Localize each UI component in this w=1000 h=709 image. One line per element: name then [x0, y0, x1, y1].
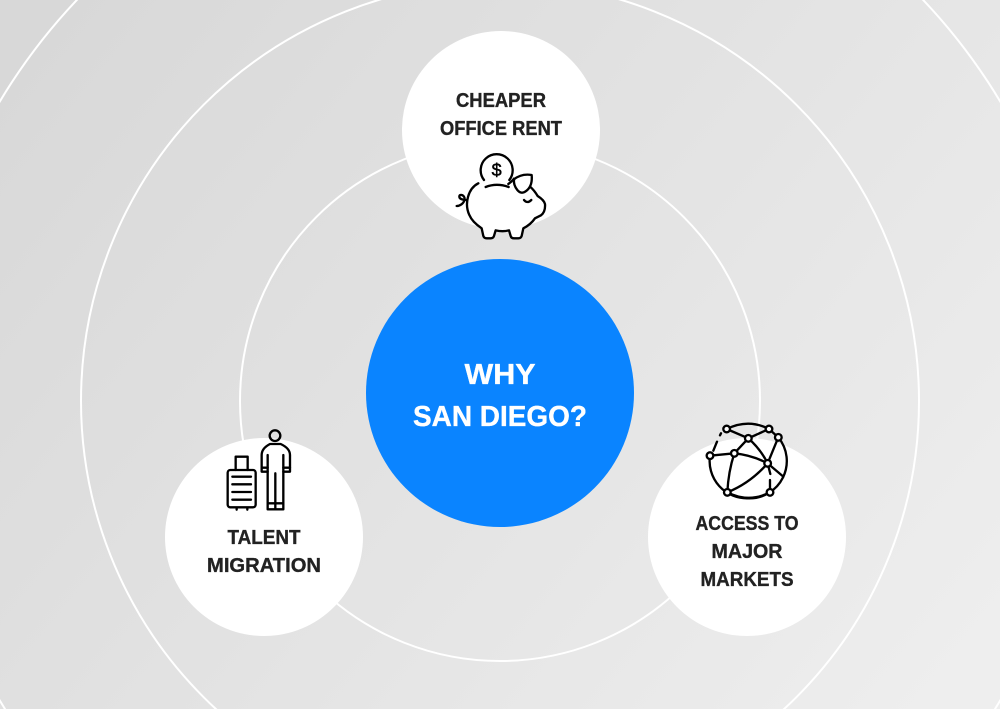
- center circle: why San Diego: SAN DIEGO?: [413, 401, 587, 433]
- center circle: why San Diego: [366, 259, 634, 527]
- heading: cheaper office rent: OFFICE RENT: [440, 118, 562, 140]
- heading: cheaper office rent: CHEAPER: [456, 90, 547, 112]
- heading: talent migration: MIGRATION: [207, 555, 321, 577]
- icon: piggy bank with coin: [457, 154, 545, 238]
- panel: cheaper office rent: [402, 31, 600, 238]
- icon: dollar sign: $: [492, 160, 502, 180]
- heading: cheaper office rent: [440, 90, 562, 140]
- heading: access to major markets: ACCESS TO: [696, 513, 798, 535]
- heading: access to major markets: [696, 513, 798, 591]
- heading: access to major markets: MAJOR: [712, 541, 783, 563]
- heading: talent migration: TALENT: [228, 527, 300, 549]
- heading: access to major markets: MARKETS: [700, 569, 794, 591]
- icon: network globe: [707, 424, 787, 498]
- icon: traveller with suitcase: [228, 430, 290, 510]
- center circle: why San Diego: WHY: [464, 359, 536, 391]
- panel: access to major markets: [648, 424, 846, 636]
- heading: talent migration: [207, 527, 321, 577]
- panel: talent migration: [165, 430, 363, 636]
